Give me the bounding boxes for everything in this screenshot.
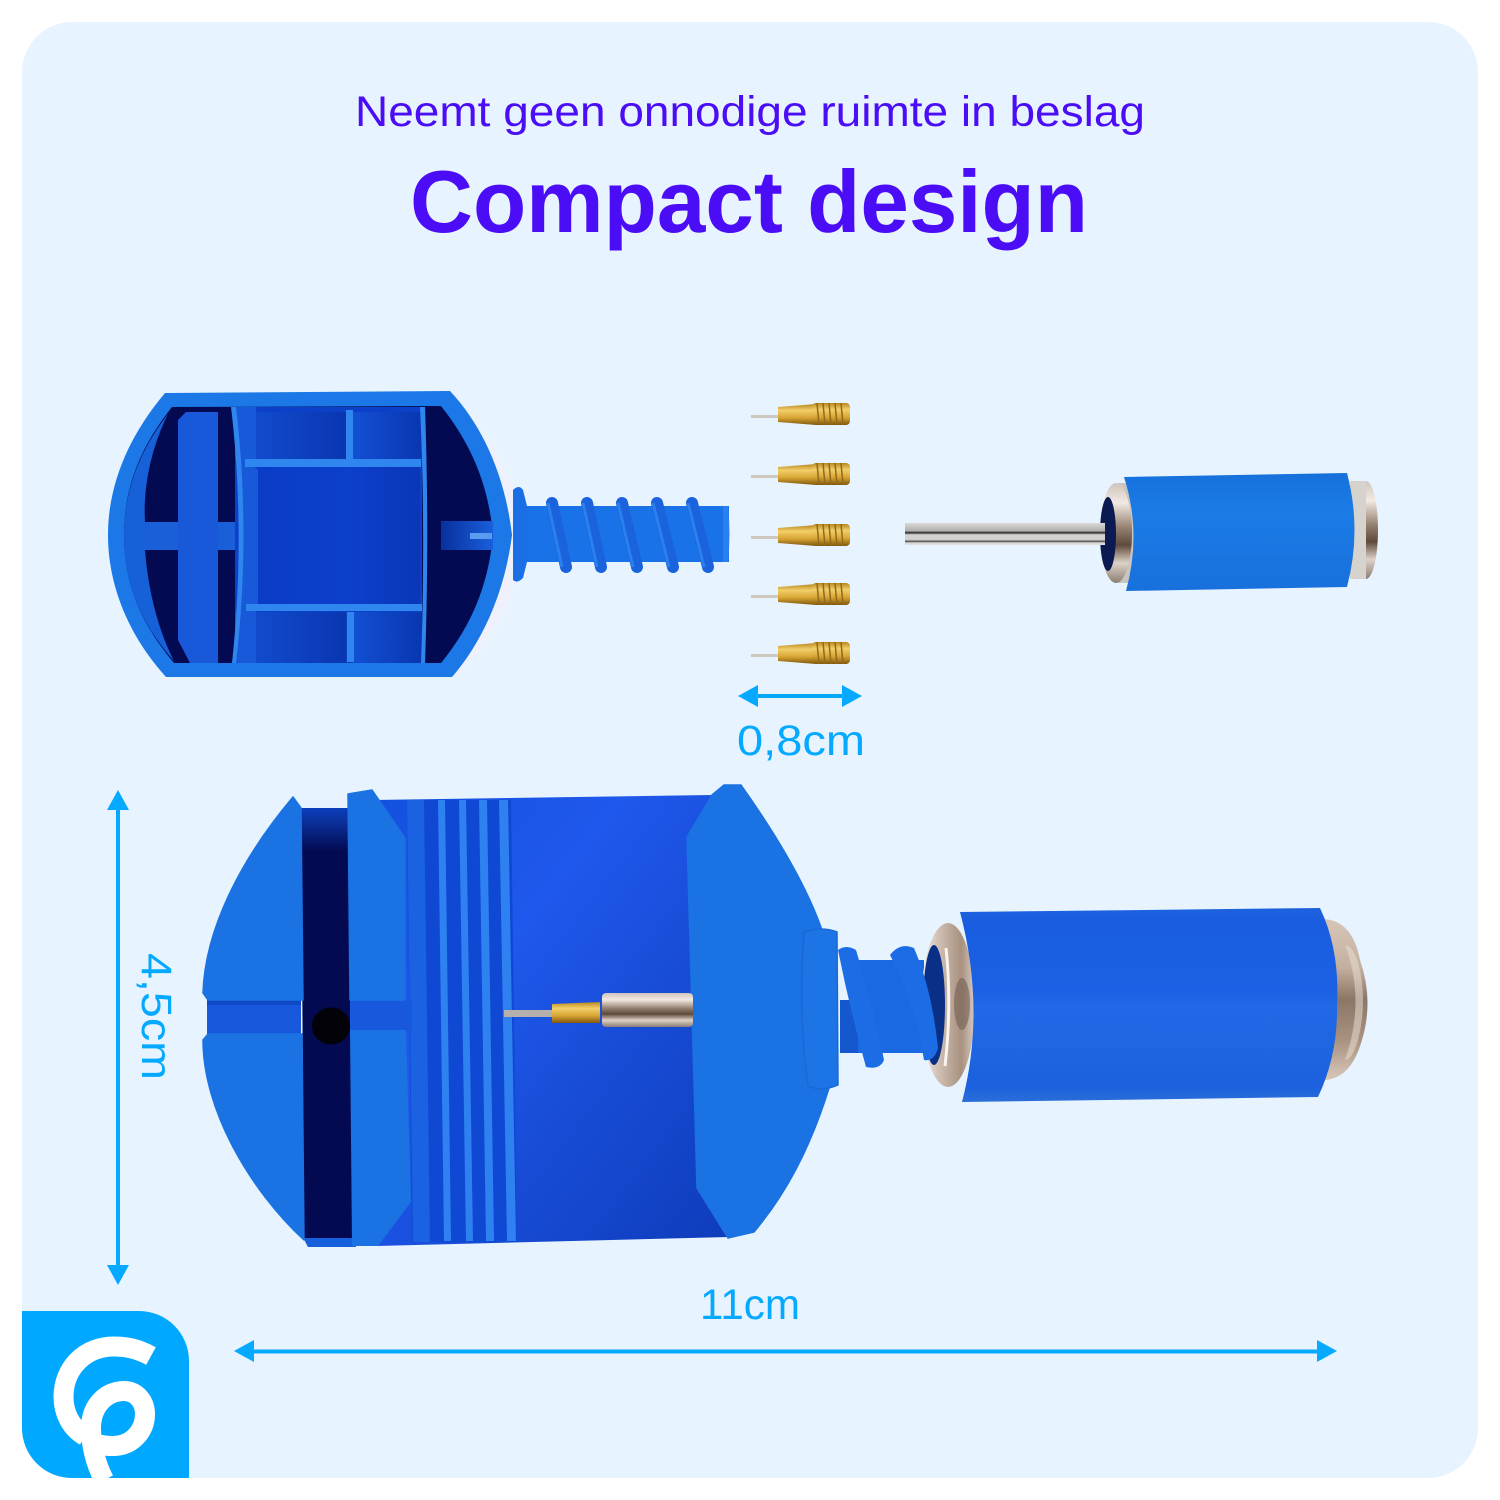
blue grip [960,908,1337,1102]
cross bar [145,522,235,550]
left block [178,412,218,663]
left ear upper [203,797,303,1000]
arrow: height 4,5cm [107,790,129,1285]
second block upper [348,790,405,1000]
tip 2 [751,463,850,485]
base strip under channel [300,1232,356,1247]
title: Compact design [410,152,1088,251]
case inner dark cavity [124,406,493,663]
tip 3 [751,524,850,546]
second block lower [350,1030,411,1246]
case outer rim [108,391,512,677]
tip 4 [751,583,850,605]
top handle with steel pin [905,473,1378,591]
right rod in cavity [441,521,493,550]
subtitle: Neemt geen onnodige ruimte in beslag [355,88,1145,136]
bottom handle with threaded neck [838,908,1368,1102]
right chrome cap [1320,919,1368,1080]
light ribs [231,407,427,663]
grooved ribs [407,800,517,1242]
left ear lower [203,1034,304,1240]
hole [312,1008,350,1044]
label: 4,5cm: 4,5cm [132,953,180,1080]
logo [22,1311,189,1480]
arrow: 0,8cm [738,685,862,707]
five gold spring-bar tips [751,403,850,664]
neck threads [838,946,938,1068]
arrow: length 11cm [234,1340,1337,1362]
tip 1 [751,403,850,425]
top tool: open case with threaded shaft [108,391,730,677]
right shoulder block [687,785,830,1238]
threaded shaft [513,487,730,582]
tip 5 [751,642,850,664]
label: 0,8cm: 0,8cm [737,717,865,765]
dark channel [301,808,352,1238]
left chrome collar [921,923,975,1087]
nub [802,929,838,1089]
label: 11cm: 11cm [700,1281,800,1329]
centre panel [235,407,422,663]
bottom tool: closed case with pin [203,785,838,1247]
main plate [375,795,729,1246]
cross slot [207,1000,301,1034]
steel and gold pin [504,993,693,1027]
